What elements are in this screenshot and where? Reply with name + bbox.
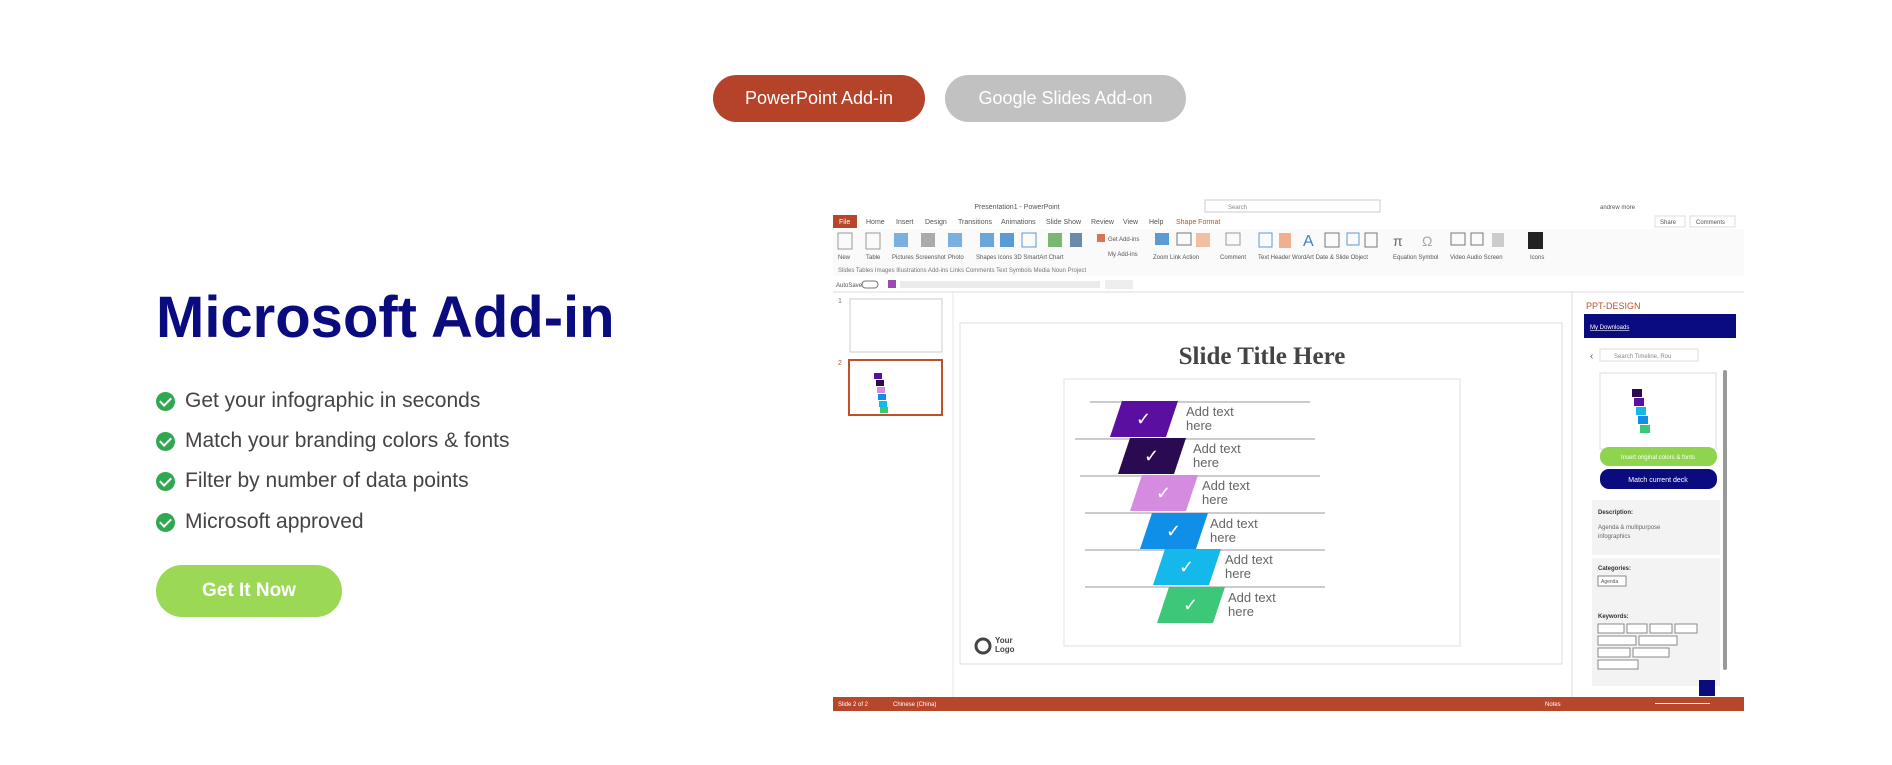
ribbon tabs: Shape Format [1176, 219, 1220, 226]
ribbon: π [1393, 233, 1403, 249]
ribbon tabs [833, 215, 1735, 228]
ribbon tabs: Animations [1001, 219, 1036, 226]
right pane: PPT-DESIGN: Match current deck [1628, 477, 1688, 484]
slide thumbnails panel [838, 292, 953, 697]
ribbon: Table [866, 255, 881, 261]
agenda items: Add text [1210, 516, 1258, 531]
bullet 4: Microsoft approved [185, 510, 364, 533]
ribbon tabs: View [1123, 219, 1139, 226]
ribbon tabs: Share [1660, 220, 1677, 226]
right pane: PPT-DESIGN: Description: [1598, 510, 1633, 516]
agenda items: here [1225, 566, 1251, 581]
screenshot: PowerPoint window [833, 200, 1744, 711]
ribbon tabs: Home [866, 219, 885, 226]
status bar: Slide 2 of 2 [838, 702, 869, 708]
right pane: PPT-DESIGN: Categories: [1598, 566, 1631, 572]
right pane: PPT-DESIGN: Agenda & multipurpose [1598, 525, 1661, 531]
ribbon: Pictures Screenshot [892, 255, 946, 261]
ribbon: A [1303, 233, 1314, 250]
tab button: Google Slides Add-on: Google Slides Add-on [978, 88, 1153, 108]
ribbon tabs: Slide Show [1046, 219, 1082, 226]
title bar: Search [1228, 205, 1247, 211]
tab button: Google Slides Add-on [945, 75, 1186, 122]
agenda items: here [1228, 604, 1254, 619]
right pane: PPT-DESIGN: My Downloads [1590, 325, 1629, 331]
logo: Your [995, 636, 1013, 645]
bullet list [156, 389, 510, 533]
agenda items: ✓ [1166, 521, 1181, 541]
slide title: Slide Title Here [1179, 343, 1345, 370]
logo [976, 636, 1015, 654]
cta button: Get It Now [202, 580, 296, 601]
title bar [974, 200, 1636, 212]
agenda items: Add text [1193, 441, 1241, 456]
ribbon: Equation Symbol [1393, 255, 1438, 261]
agenda items: ✓ [1144, 446, 1159, 466]
ribbon tabs: Insert [896, 219, 914, 226]
ribbon tabs: Help [1149, 219, 1164, 226]
ribbon: Ω [1422, 233, 1432, 249]
ribbon: Icons [1530, 255, 1544, 261]
ribbon [833, 229, 1744, 276]
right pane: PPT-DESIGN: Search Timeline, Rou [1614, 354, 1671, 360]
ribbon: Slides Tables Images Illustrations Add-ins Links Comments Text Symbols Media Noun Project [838, 268, 1087, 274]
ribbon tabs: Transitions [958, 219, 992, 226]
slide thumbnails panel: 1 [838, 298, 842, 305]
ribbon: My Add-ins [1108, 252, 1138, 258]
tab button: PowerPoint Add-in: PowerPoint Add-in [745, 88, 893, 108]
heading: Microsoft Add-in [156, 285, 615, 350]
bullet 3: Filter by number of data points [185, 469, 469, 492]
quick access toolbar [836, 280, 1133, 289]
ribbon: Text Header WordArt Date & Slide Object [1258, 255, 1368, 261]
agenda items: ✓ [1183, 595, 1198, 615]
status bar [833, 697, 1744, 711]
title bar: andrew more [1600, 205, 1636, 211]
agenda items: Add text [1228, 590, 1276, 605]
right pane: PPT-DESIGN: Insert original colors & fonts [1621, 455, 1695, 461]
ribbon: Shapes Icons 3D SmartArt Chart [976, 255, 1064, 261]
agenda items [1075, 401, 1325, 623]
agenda items: Add text [1202, 478, 1250, 493]
cta button [156, 565, 342, 617]
right pane: PPT-DESIGN: ‹ [1590, 351, 1593, 362]
agenda items: Add text [1225, 552, 1273, 567]
status bar: Chinese (China) [893, 702, 936, 708]
right pane: PPT-DESIGN: infographics [1598, 534, 1630, 540]
bullet 1: Get your infographic in seconds [185, 389, 480, 412]
logo: Logo [995, 645, 1015, 654]
tab button: PowerPoint Add-in [713, 75, 925, 122]
ribbon: Zoom Link Action [1153, 255, 1199, 261]
ribbon: Get Add-ins [1108, 237, 1139, 243]
agenda items: Add text [1186, 404, 1234, 419]
ribbon: Photo [948, 255, 964, 261]
agenda items: here [1186, 418, 1212, 433]
agenda items: here [1202, 492, 1228, 507]
quick access toolbar: AutoSave [836, 283, 863, 289]
ribbon tabs: File [839, 219, 850, 226]
status bar: Notes [1545, 702, 1561, 708]
agenda items: ✓ [1179, 557, 1194, 577]
agenda items: here [1210, 530, 1236, 545]
bullet 2: Match your branding colors & fonts [185, 429, 510, 452]
agenda items: ✓ [1136, 409, 1151, 429]
right pane: PPT-DESIGN: PPT-DESIGN [1586, 301, 1641, 311]
ribbon tabs: Comments [1696, 220, 1725, 226]
ribbon: New [838, 255, 851, 261]
agenda items: ✓ [1156, 483, 1171, 503]
ribbon: Video Audio Screen [1450, 255, 1503, 261]
ribbon: Comment [1220, 255, 1246, 261]
slide canvas [960, 323, 1562, 664]
slide thumbnails panel: 2 [838, 360, 842, 367]
ribbon tabs: Design [925, 219, 947, 226]
agenda items: here [1193, 455, 1219, 470]
right pane: PPT-DESIGN [1572, 292, 1736, 697]
ribbon tabs: Review [1091, 219, 1115, 226]
title bar: Presentation1 - PowerPoint [974, 204, 1060, 211]
right pane: PPT-DESIGN: Keywords: [1598, 614, 1629, 620]
right pane: PPT-DESIGN: Agenda [1601, 579, 1618, 585]
